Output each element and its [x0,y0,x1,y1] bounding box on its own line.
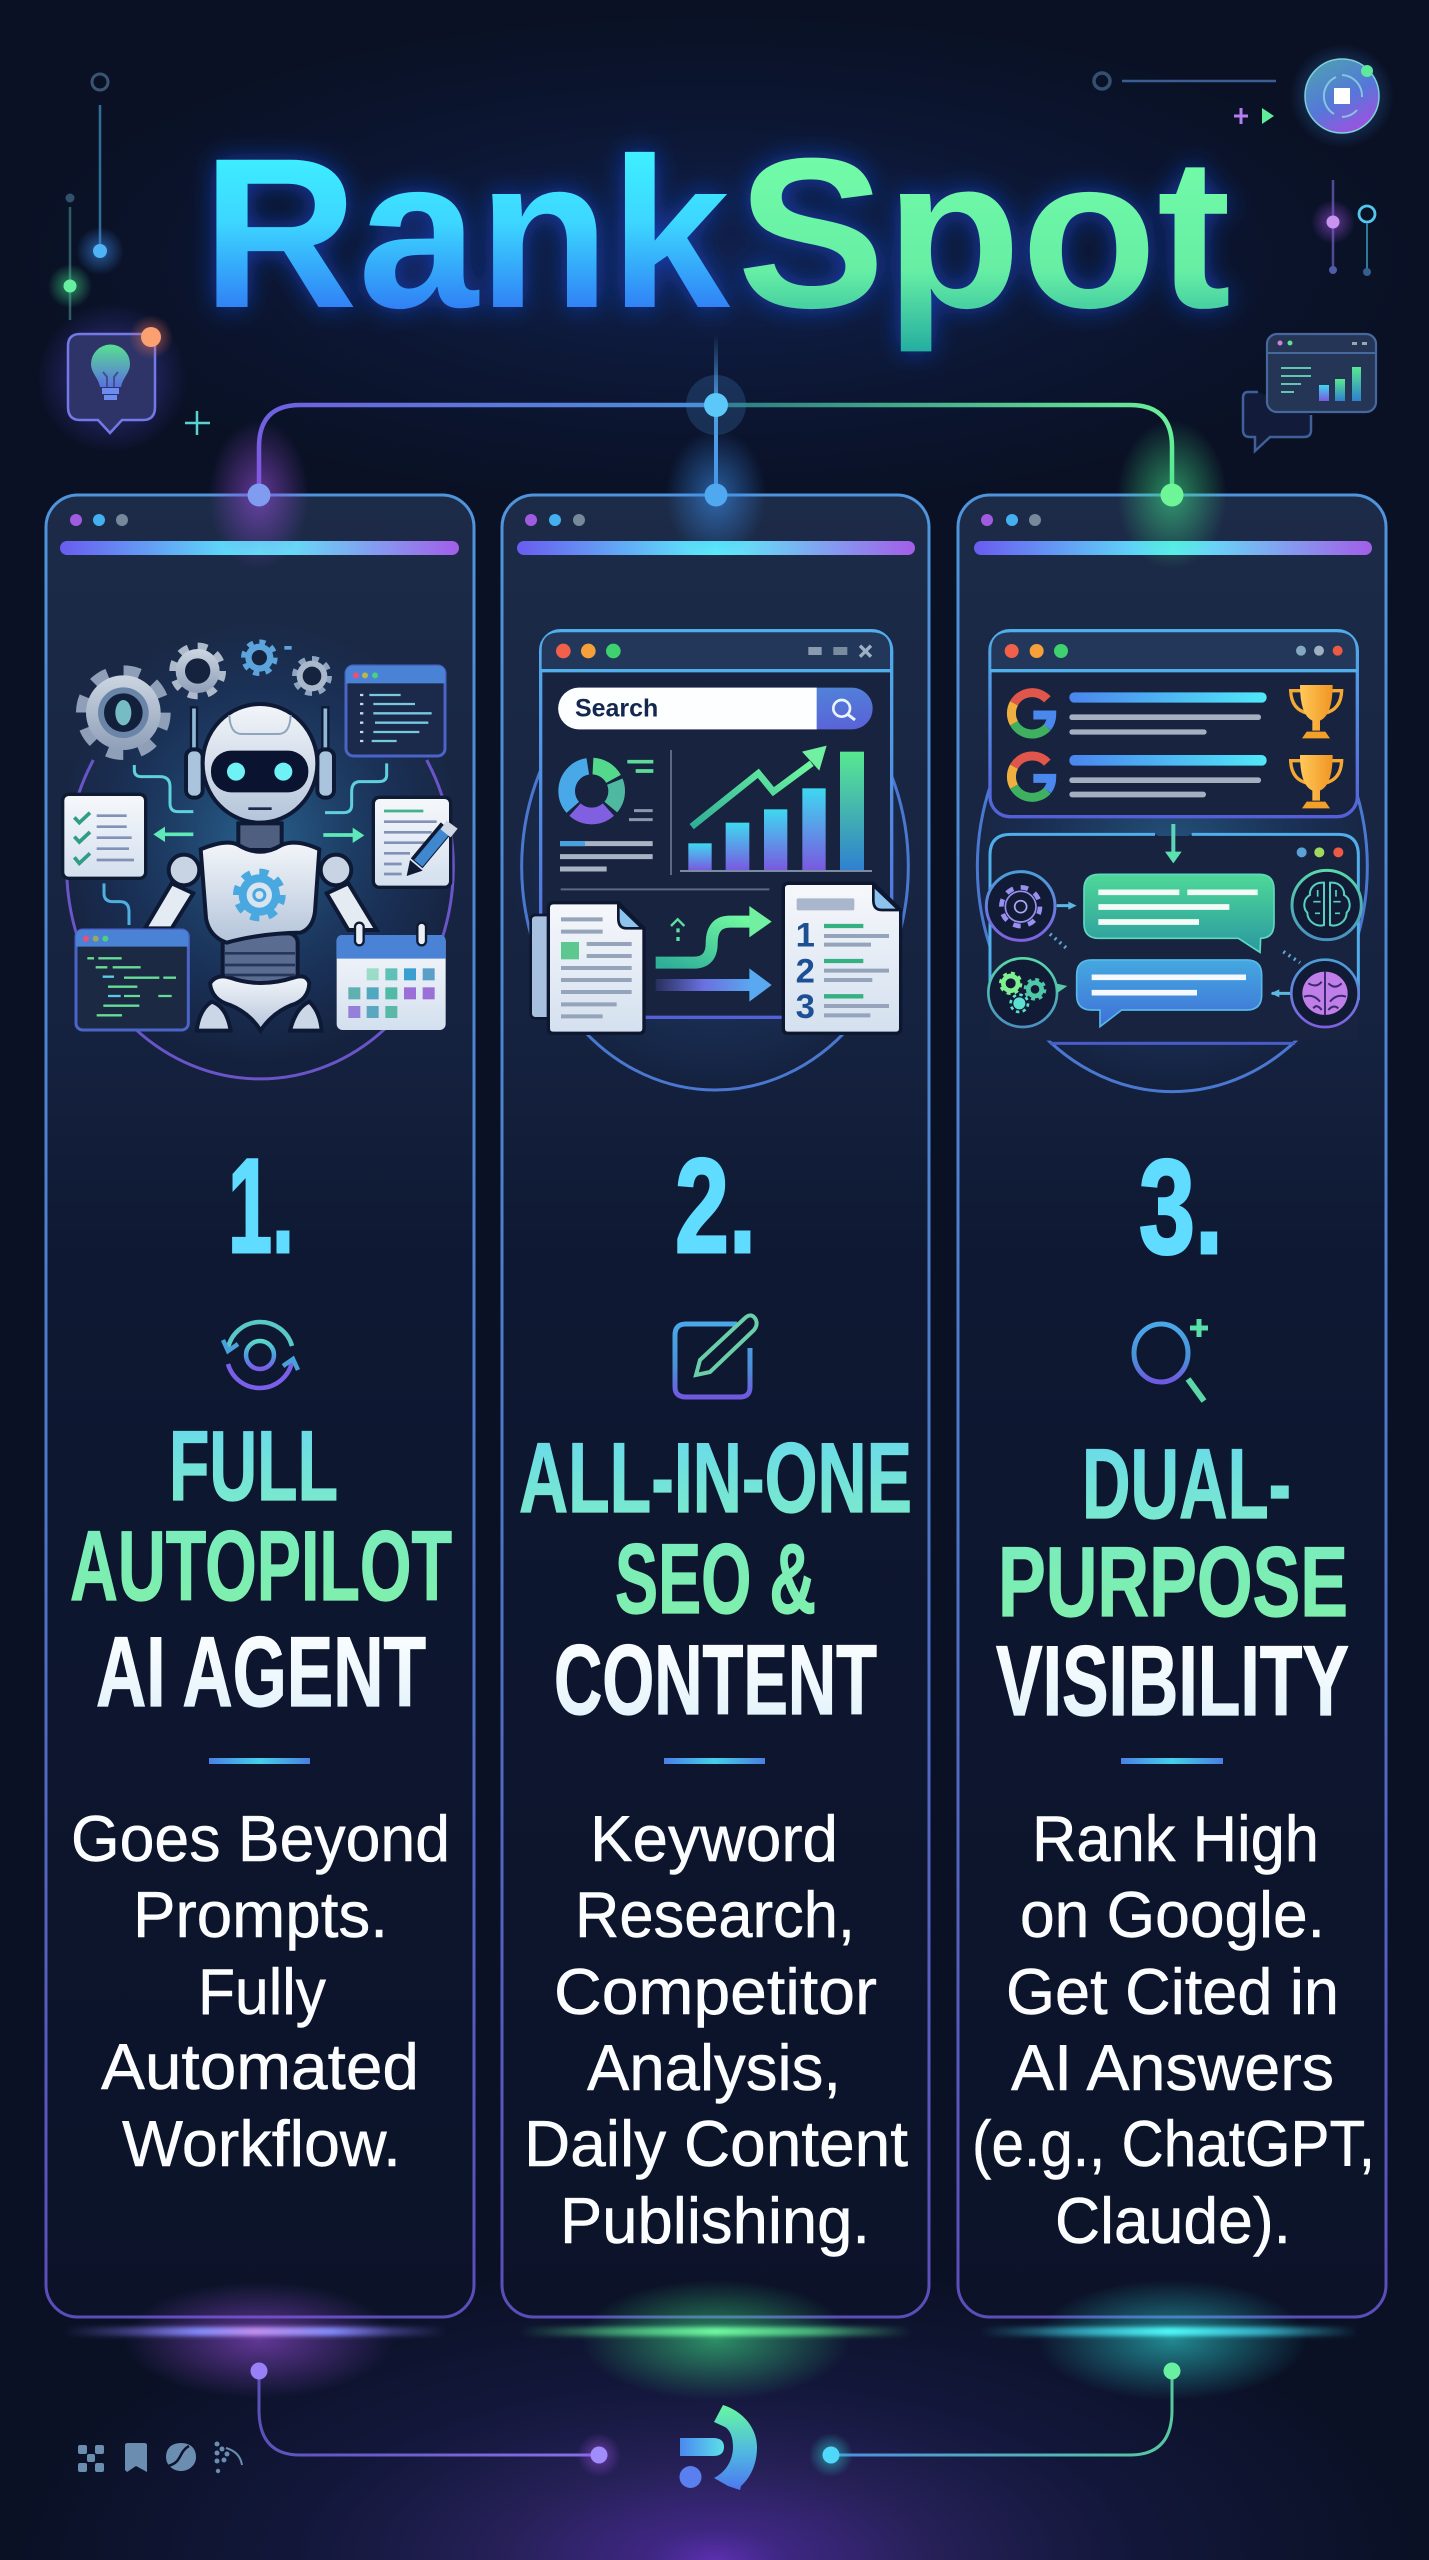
panel frame [502,495,929,2317]
bar chart [680,746,872,871]
connector: bottom left [250,2362,621,2477]
body text [71,1802,450,2180]
body text: Keyword [590,1802,838,1875]
heading [519,1422,912,1735]
donut chart [567,766,617,816]
body text: Analysis, [587,2031,841,2104]
icon circle: brain outline [1292,870,1361,940]
blue chat bubble [1077,960,1262,1027]
body text: Prompts. [133,1878,388,1951]
icon: edit pencil [675,1315,757,1397]
divider [1121,1758,1223,1764]
body text: on Google. [1020,1878,1325,1951]
illustration: robot agent [60,620,460,1079]
search results window [990,631,1357,817]
body text: Daily Content [524,2107,908,2180]
decoration: right sliders [1311,180,1375,276]
body text: Get Cited in [1006,1955,1339,2028]
body text: Automated [101,2030,419,2103]
green chat bubble [1084,874,1274,952]
panel 3: dual-purpose visibility [958,495,1386,2317]
icon: magnifier with plus [1134,1319,1208,1401]
heading: FULL [169,1410,338,1521]
window dots [981,514,1041,526]
document and pencil [373,797,458,887]
icon circle: gears [988,958,1067,1027]
icon: autopilot sync [223,1322,298,1388]
body text: Research, [575,1878,855,1951]
panel 2: all-in-one SEO and content [502,495,929,2317]
icon: dashboard window with chat bubble [1243,334,1376,451]
google logo [1011,756,1052,797]
icon: light bulb speech box [37,303,187,453]
AI answers window [986,824,1361,1043]
illustration: google rankings and AI answers [971,631,1374,1097]
browser window [541,631,892,1017]
checklist [63,794,146,878]
left document [531,903,644,1033]
bottom glow: panel 1 [64,2282,447,2398]
robot [145,704,377,1031]
right document: 3 [796,988,815,1026]
gears [82,642,329,754]
body text: Goes Beyond [71,1802,450,1875]
heading: CONTENT [554,1624,877,1735]
right document: 2 [796,952,815,990]
code window: top right [346,666,445,756]
window dots [70,514,128,526]
body text: (e.g., ChatGPT, [972,2107,1375,2180]
body text: Competitor [554,1955,877,2028]
body text [972,1802,1375,2257]
top connector nodes [209,420,1227,570]
trophy [1291,685,1342,738]
title: Spot [737,114,1231,353]
body text: Claude). [1055,2184,1291,2257]
body text: Fully [198,1955,326,2028]
number: 1. [228,1132,294,1281]
connector: bottom right [809,2362,1180,2477]
logo [680,2405,757,2490]
connectors: top [259,335,1172,495]
decoration: plus sign [185,411,210,435]
google logo [1011,693,1052,734]
body text [524,1802,908,2257]
search bar [558,688,873,729]
trophy [1291,755,1342,808]
heading: AUTOPILOT [70,1510,452,1621]
panel frame [958,495,1386,2317]
title: Rank [202,114,731,353]
number: 3. [1139,1133,1223,1282]
body text: Workflow. [122,2107,401,2180]
icon circle: purple brain [1291,960,1359,1027]
decoration: top-right orb and line [1094,44,1394,148]
connector traces [134,763,387,813]
window dots [525,514,585,526]
small footer icons [78,2442,242,2473]
bottom glow: panel 2 [520,2280,911,2400]
divider [664,1758,765,1764]
decoration: top-left node lines [48,74,124,320]
search bar: Search [575,696,658,723]
code window: bottom left [76,930,188,1030]
icon circle: gear [986,872,1055,940]
body text: AI Answers [1011,2031,1334,2104]
panel 1: full autopilot AI agent [46,495,474,2317]
title [202,114,1231,353]
right document: 1 [796,917,815,955]
heading [70,1410,452,1727]
heading: DUAL- [1082,1428,1291,1539]
header bar [517,541,915,555]
heading: AI AGENT [96,1616,426,1727]
heading: ALL-IN-ONE [519,1422,912,1533]
body text: Publishing. [560,2184,870,2257]
calendar [337,923,446,1030]
number: 2. [675,1132,756,1281]
body text: Rank High [1032,1802,1319,1875]
heading: SEO & [615,1523,816,1634]
content arrows [656,906,772,1002]
divider [209,1758,310,1764]
header bar [974,541,1372,555]
right document [783,883,901,1033]
bottom glow: panel 3 [980,2280,1358,2400]
heading [996,1428,1349,1736]
illustration: search dashboard [515,631,915,1097]
panel frame [46,495,474,2317]
header bar [60,541,459,555]
